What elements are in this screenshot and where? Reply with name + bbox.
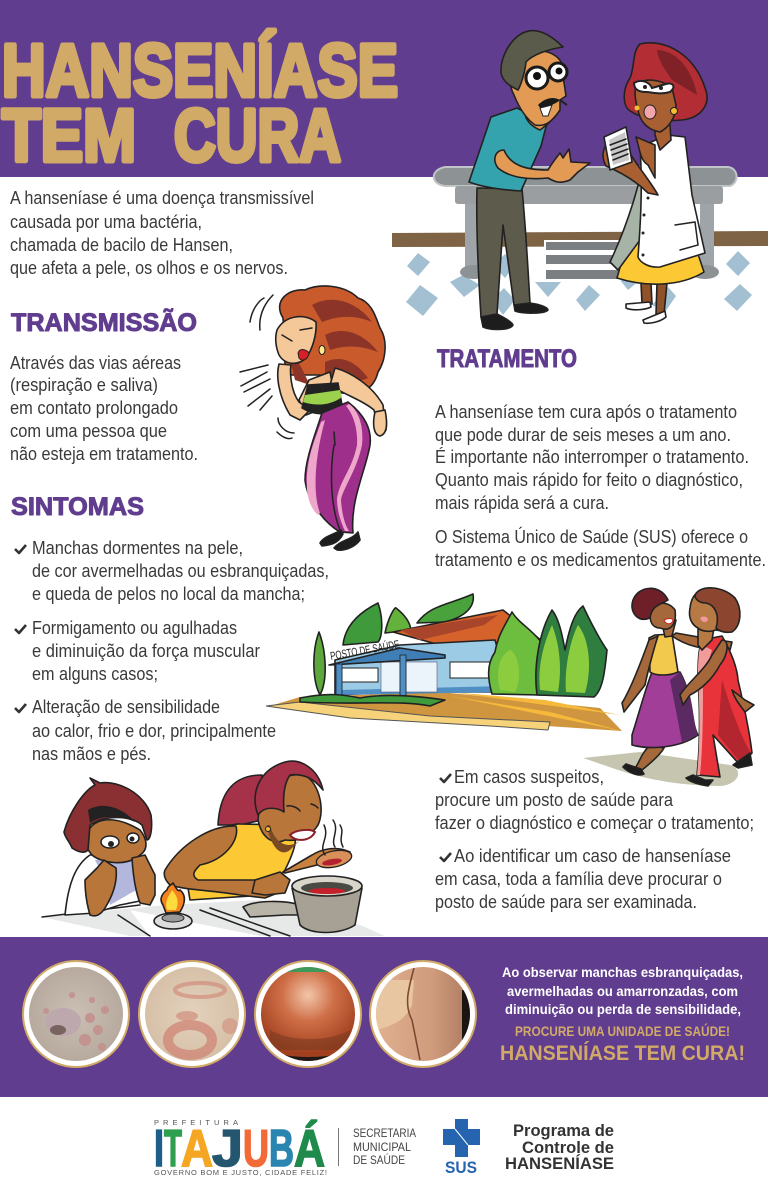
heading: transmissão: TRANSMISSÃO: [11, 307, 197, 337]
title: [2, 29, 398, 177]
text: secretaria: [353, 1126, 416, 1167]
title: HANSENÍASE: [2, 29, 398, 112]
logo: Prefeitura de Itajubá: Á: [294, 1120, 325, 1178]
list: orientações: em casa, toda a família deve procurar o: [435, 869, 722, 889]
sign: POSTO DE SAÚDE: [329, 638, 401, 663]
woman: [164, 761, 353, 900]
list: orientações: Em casos suspeitos,: [454, 767, 604, 787]
list: sintomas: de cor avermelhadas ou esbranquiçadas,: [32, 561, 329, 581]
footer panel: [0, 937, 768, 1097]
divider: [338, 1128, 339, 1166]
text: programa de controle: Programa de: [513, 1121, 614, 1140]
logo: Prefeitura de Itajubá: U: [243, 1120, 269, 1178]
logo: Prefeitura de Itajubá: A: [181, 1120, 213, 1178]
title: CURA: [174, 94, 341, 177]
logo: SUS: SUS: [445, 1158, 477, 1177]
man: [469, 31, 590, 329]
callout text: avermelhadas ou amarronzadas, com: [507, 984, 738, 999]
icon: check: [15, 545, 26, 553]
list: orientações: Ao identificar um caso de hanseníase: [454, 846, 731, 866]
callout text: HANSENÍASE TEM CURA!: [500, 1042, 745, 1065]
logo: Prefeitura de Itajubá: PREFEITURA: [154, 1118, 238, 1127]
text: programa de controle: Controle de: [522, 1138, 614, 1157]
text: tratamento: [435, 402, 766, 570]
illustration: kitchen accident: [42, 761, 385, 936]
logo: Prefeitura de Itajubá: [154, 1118, 327, 1178]
text: transmissão: com uma pessoa que: [10, 421, 167, 441]
intro text: chamada de bacilo de Hansen,: [10, 235, 233, 255]
icon: check: [440, 774, 451, 782]
callout text: PROCURE UMA UNIDADE DE SAÚDE!: [515, 1022, 730, 1039]
list: sintomas: em alguns casos;: [32, 664, 158, 684]
list: sintomas: e diminuição da força muscular: [32, 641, 260, 661]
intro text: que afeta a pele, os olhos e os nervos.: [10, 258, 288, 278]
text: programa de controle: [505, 1121, 614, 1173]
text: tratamento: A hanseníase tem cura após o tratamento: [435, 402, 737, 422]
exam table: [434, 167, 737, 280]
list: sintomas: Formigamento ou agulhadas: [32, 618, 237, 638]
header band: [0, 0, 768, 177]
text: transmissão: em contato prolongado: [10, 398, 178, 418]
text: transmissão: [10, 353, 198, 464]
text: secretaria: DE SAÚDE: [353, 1152, 405, 1167]
intro text: causada por uma bactéria,: [10, 212, 202, 232]
heading: tratamento: TRATAMENTO: [437, 345, 577, 373]
text: secretaria: SECRETARIA: [353, 1126, 416, 1140]
text: transmissão: (respiração e saliva): [10, 375, 158, 395]
list: sintomas: e queda de pelos no local da mancha;: [32, 584, 305, 604]
logo: Prefeitura de Itajubá: T: [164, 1120, 182, 1178]
logo: SUS: [443, 1119, 480, 1177]
photo: lesion 4: [369, 960, 477, 1068]
list: orientações: procure um posto de saúde para: [435, 790, 674, 810]
text: secretaria: MUNICIPAL: [353, 1140, 411, 1154]
logo: Prefeitura de Itajubá: I: [154, 1120, 164, 1178]
illustration: patient and doctor in clinic: [392, 31, 768, 329]
title: TEM: [2, 94, 136, 177]
list: orientações: [435, 767, 754, 912]
text: transmissão: não esteja em tratamento.: [10, 444, 198, 464]
list: sintomas: nas mãos e pés.: [32, 744, 151, 764]
heading: sintomas: SINTOMAS: [11, 493, 144, 521]
text: tratamento: Quanto mais rápido for feito o diagnóstico,: [435, 470, 743, 490]
floor tiles: [406, 251, 752, 316]
text: tratamento: mais rápida será a cura.: [435, 493, 609, 513]
photo: lesion 1: [22, 960, 130, 1068]
list: orientações: posto de saúde para ser examinada.: [435, 892, 697, 912]
intro text: [10, 188, 314, 278]
intro text: A hanseníase é uma doença transmissível: [10, 188, 314, 208]
pot: [243, 876, 362, 932]
list: sintomas: Manchas dormentes na pele,: [32, 538, 243, 558]
icon: check: [15, 704, 26, 712]
photo: lesion 2: [138, 960, 246, 1068]
logo: Prefeitura de Itajubá: J: [212, 1120, 243, 1178]
callout text: diminuição ou perda de sensibilidade,: [505, 1002, 741, 1017]
icon: check: [440, 853, 451, 861]
list: sintomas: [15, 538, 329, 764]
callout text: Ao observar manchas esbranquiçadas,: [502, 965, 743, 980]
icon: check: [15, 625, 26, 633]
brown wall strip: [392, 231, 768, 247]
illustration: health post: [266, 594, 622, 731]
text: tratamento: que pode durar de seis meses a um ano.: [435, 425, 731, 445]
logo: Prefeitura de Itajubá: B: [269, 1120, 294, 1178]
boy: [64, 778, 155, 916]
callout text: [500, 965, 745, 1065]
text: programa de controle: HANSENÍASE: [505, 1154, 614, 1173]
photo: lesion 3: [254, 960, 362, 1068]
list: sintomas: Alteração de sensibilidade: [32, 697, 220, 717]
doctor: [603, 43, 707, 323]
illustration: woman coughing: [240, 286, 387, 550]
text: transmissão: Através das vias aéreas: [10, 353, 181, 373]
stove flame: [154, 883, 192, 929]
logo: Prefeitura de Itajubá: GOVERNO BOM E JUSTO, CIDADE FELIZ!: [154, 1168, 327, 1177]
illustration: two women walking: [583, 588, 754, 786]
list: sintomas: ao calor, frio e dor, principalmente: [32, 721, 276, 741]
